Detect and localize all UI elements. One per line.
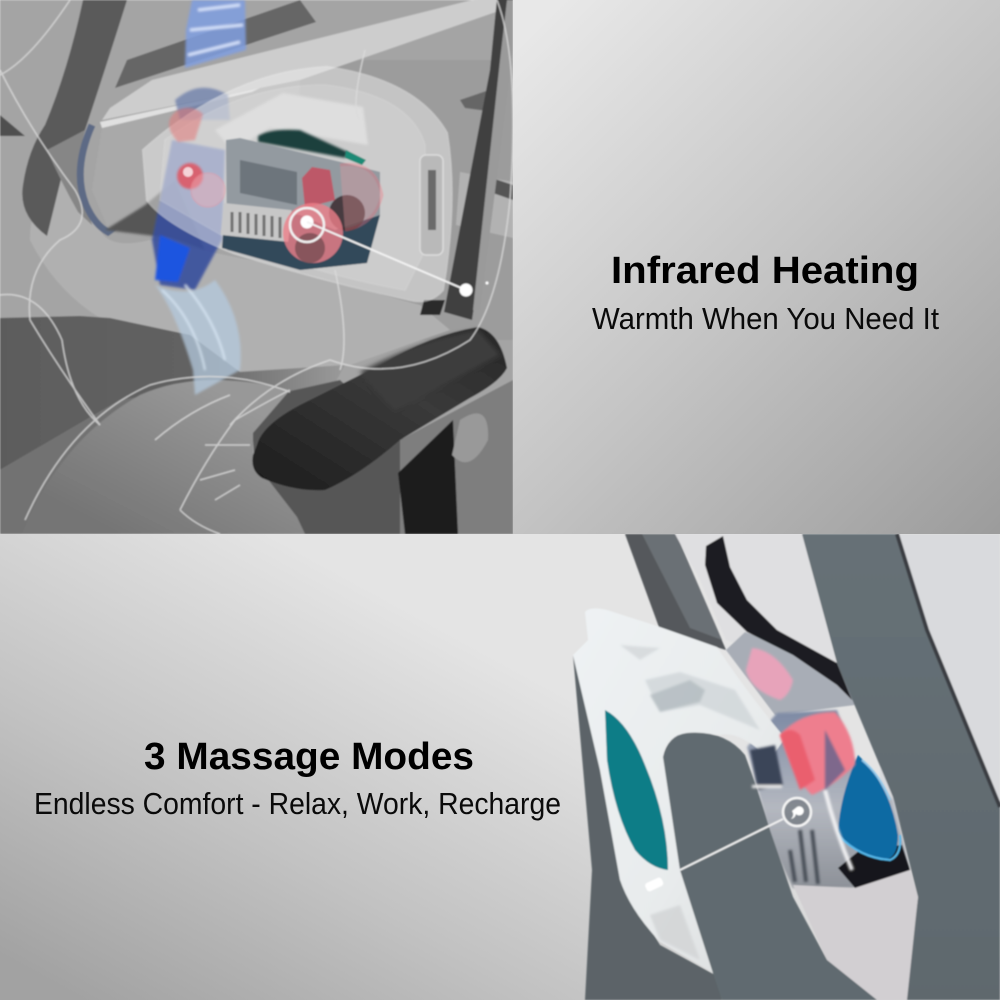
dark under arm: [250, 380, 405, 534]
teal pad: [605, 710, 668, 870]
seat cushion: [0, 316, 345, 470]
translucent light band: [102, 0, 513, 120]
subheading: warmth: Warmth When You Need It: [592, 301, 939, 336]
shell internal details: [620, 645, 760, 960]
icon: armrest: [252, 327, 507, 490]
background: top right gradient: [0, 0, 1000, 534]
lower seat: [0, 398, 134, 534]
side housing: [420, 155, 443, 255]
central grey arch: [663, 733, 877, 1000]
dark chair frame: [625, 534, 726, 650]
left dark frame: [573, 655, 722, 1000]
callout: heat pointer: [290, 208, 488, 296]
back blue cushion: [838, 755, 898, 860]
heater pink nodes: [746, 648, 793, 700]
callout: massage pointer: [644, 798, 811, 892]
teal housing: [258, 130, 348, 158]
right lower area: [400, 380, 513, 534]
translucent headrest pad: [143, 67, 452, 301]
left red cluster: [177, 163, 203, 189]
mechanism detail: [750, 745, 852, 884]
background: bottom gradient: [0, 534, 1000, 1000]
right chair pillar: [444, 0, 513, 320]
desk shadow shape: [115, 0, 316, 88]
panel: massage modes chair photo: [573, 534, 1000, 1000]
window area inside chair back: [108, 188, 163, 228]
grey body block: [226, 138, 380, 270]
right light cushion: [880, 534, 1000, 824]
white shell: [573, 608, 785, 973]
heading: 3 massage modes: 3 Massage Modes: [144, 736, 474, 778]
heading: infrared heating: Infrared Heating: [611, 250, 919, 292]
lower body torso: [30, 170, 450, 372]
small dark wedge: [0, 115, 25, 136]
inner cavity: [747, 710, 910, 888]
inner dark shadow under pad: [106, 191, 201, 245]
body outline curves: [0, 0, 513, 534]
thigh: [58, 380, 306, 534]
heater fins: [221, 203, 292, 242]
massage motor: [169, 93, 443, 270]
black ring: [705, 536, 852, 700]
right desk shadow: [460, 91, 486, 111]
chair back dark frame: [22, 0, 127, 236]
lower seat light area: [793, 868, 918, 1000]
arm post and bracket: [398, 420, 458, 534]
blue spine: [152, 0, 246, 395]
blue tinted frame edge: [76, 123, 116, 236]
top white cover: [216, 94, 368, 144]
light seat disc: [675, 534, 838, 668]
red gear accents: [302, 167, 335, 208]
chair back inner frame: [47, 130, 92, 225]
subheading: endless comfort: Endless Comfort - Relax, Work, Recharge: [34, 786, 561, 821]
panel: infrared heating chair photo: [0, 0, 513, 534]
large grey back band: [802, 534, 1000, 1000]
